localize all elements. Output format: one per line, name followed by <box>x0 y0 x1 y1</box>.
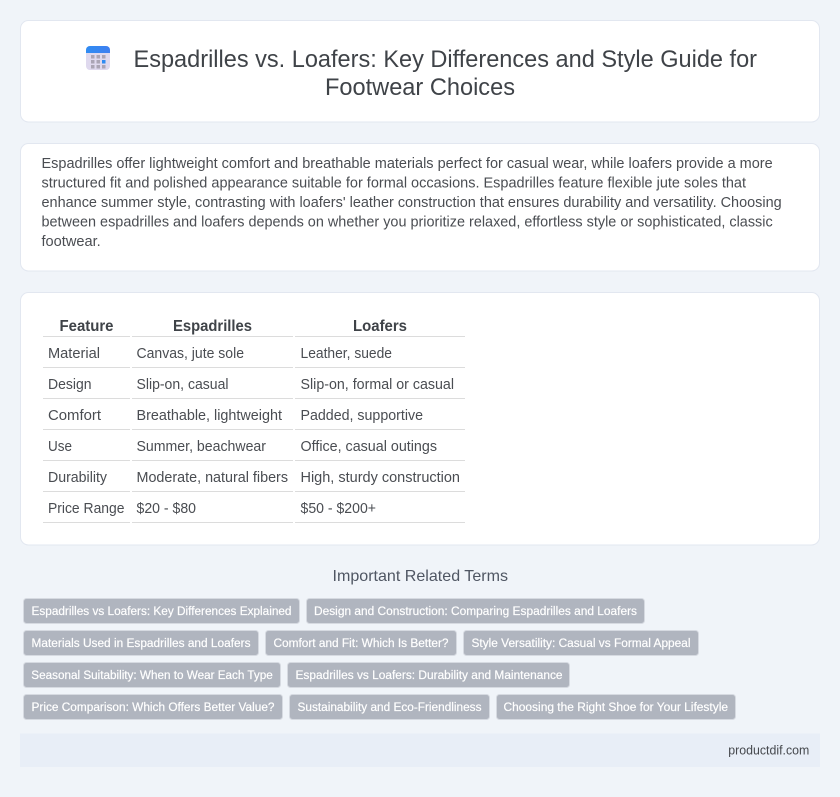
title <box>134 46 757 101</box>
table row: comfort: Comfort <box>48 408 101 424</box>
table row: comfort: Padded, supportive <box>300 408 423 424</box>
table row: price range <box>48 501 376 517</box>
table row: use: Office, casual outings <box>300 439 437 455</box>
table row: design: Slip-on, casual <box>136 377 228 393</box>
text block: introduction paragraph: Espadrilles offer lightweight comfort and breathable materials perfect for casual wear, while loafers provide a more <box>42 156 773 172</box>
table row: design <box>48 377 454 393</box>
tag: Comfort and Fit: Which Is Better? <box>274 636 449 650</box>
table row: use <box>48 439 437 455</box>
table row: material: Canvas, jute sole <box>136 346 244 362</box>
tag: Style Versatility: Casual vs Formal Appeal <box>472 636 690 650</box>
table row: durability <box>48 470 460 486</box>
tag <box>496 694 736 720</box>
tag <box>266 630 456 656</box>
footer source text: productdif.com <box>728 742 809 758</box>
tag <box>306 598 644 624</box>
table row: durability: High, sturdy construction <box>300 470 460 486</box>
tag: Materials Used in Espadrilles and Loafers <box>32 636 250 650</box>
table header row <box>60 318 407 335</box>
tag <box>288 662 570 688</box>
tag <box>24 694 282 720</box>
tag <box>290 694 490 720</box>
tag <box>24 662 280 688</box>
table row: material <box>48 346 392 362</box>
table row: design: Design <box>48 377 92 393</box>
tag <box>24 630 258 656</box>
table row: price range: $20 - $80 <box>136 501 196 517</box>
panel: comparison table <box>20 292 820 545</box>
tag <box>24 598 300 624</box>
tag: Seasonal Suitability: When to Wear Each Type <box>31 668 273 682</box>
title: Footwear Choices <box>325 74 515 101</box>
table row: price range: Price Range <box>48 501 124 517</box>
icon: calendar <box>86 46 110 70</box>
text block: introduction paragraph <box>42 156 782 250</box>
tag: Design and Construction: Comparing Espadrilles and Loafers <box>314 604 637 618</box>
table row: use: Use <box>48 439 72 455</box>
table header row: Espadrilles <box>173 318 252 335</box>
tag: Price Comparison: Which Offers Better Value? <box>32 700 275 714</box>
tag: Sustainability and Eco-Friendliness <box>298 700 482 714</box>
text block: introduction paragraph: between espadrilles and loafers depends on whether you prioritize relaxed, effortless style or sophisticated, classic <box>42 214 773 230</box>
heading: related terms: Important Related Terms <box>332 568 508 585</box>
table row: material: Leather, suede <box>300 346 392 362</box>
tag <box>464 630 698 656</box>
title: Espadrilles vs. Loafers: Key Differences and Style Guide for <box>134 46 757 73</box>
table row: use: Summer, beachwear <box>136 439 266 455</box>
text block: introduction paragraph: enhance summer style, contrasting with loafers' leather construction that ensures durability and versatility. Choosing <box>42 195 782 211</box>
panel: header <box>20 20 820 122</box>
table header row: Loafers <box>353 318 407 335</box>
tag: Espadrilles vs Loafers: Durability and Maintenance <box>296 668 563 682</box>
table row: comfort: Breathable, lightweight <box>136 408 282 424</box>
table row: design: Slip-on, formal or casual <box>300 377 454 393</box>
tag: Espadrilles vs Loafers: Key Differences Explained <box>32 604 292 618</box>
panel: introduction <box>20 144 820 271</box>
tag list: related terms <box>24 598 736 720</box>
text block: introduction paragraph: structured fit and polished appearance suitable for formal occasions. Espadrilles feature flexible jute soles that <box>42 176 746 192</box>
tag: Choosing the Right Shoe for Your Lifestyle <box>504 700 728 714</box>
table header row: Feature <box>60 318 114 335</box>
table row: price range: $50 - $200+ <box>300 501 376 517</box>
table row: durability: Moderate, natural fibers <box>136 470 288 486</box>
footer <box>20 734 820 767</box>
text block: introduction paragraph: footwear. <box>42 234 101 250</box>
table row: material: Material <box>48 346 100 362</box>
table row: durability: Durability <box>48 470 108 486</box>
table row: comfort <box>48 408 423 424</box>
